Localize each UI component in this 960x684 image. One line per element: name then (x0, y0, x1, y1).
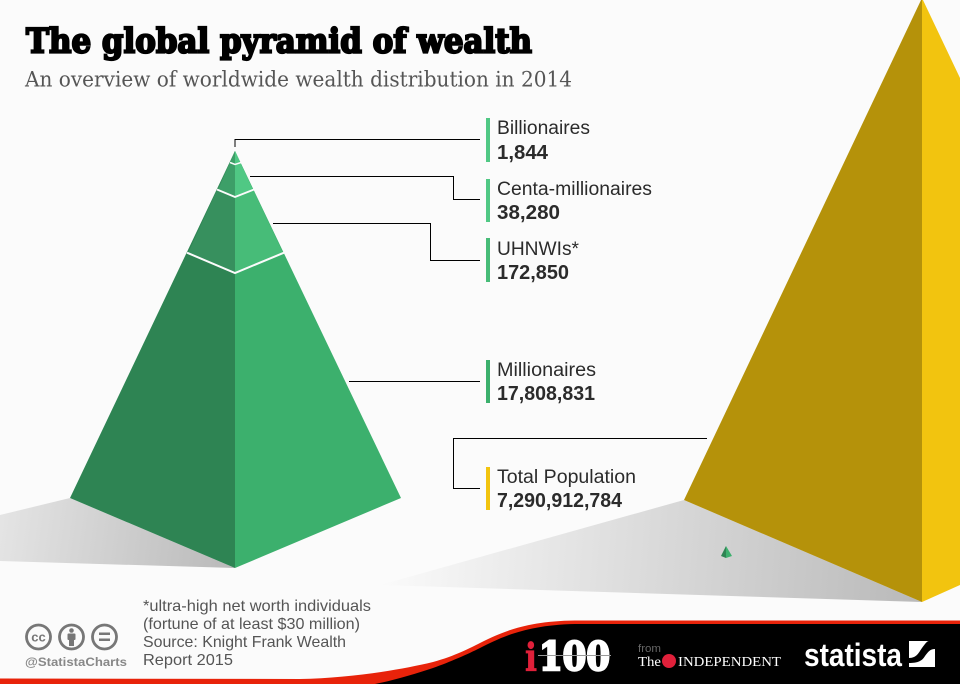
footnote and source: Source: Knight Frank Wealth (143, 634, 346, 651)
connector: billionaires (235, 140, 480, 147)
connector: centa-millionaires (250, 176, 480, 200)
label: millionaires: 17,808,831 (497, 383, 595, 405)
icon: creative commons licence: cc (31, 630, 46, 644)
connector: millionaires (349, 380, 480, 382)
label: total population: 7,290,912,784 (497, 490, 623, 512)
footer band: black (375, 624, 960, 684)
label: total population (486, 467, 636, 512)
label: millionaires (486, 360, 596, 405)
label: UHNWIs: UHNWIs* (497, 239, 580, 260)
shadow: green pyramid (0, 498, 235, 568)
connector: UHNWIs (273, 224, 480, 260)
label: centa-millionaires (486, 179, 652, 224)
footnote and source: *ultra-high net worth individuals (143, 598, 371, 615)
label: billionaires (486, 118, 590, 164)
chart: gold population pyramid (684, 0, 960, 602)
label: centa-millionaires: 38,280 (497, 202, 560, 224)
logo: from The Independent: from (638, 643, 661, 655)
footnote and source: (fortune of at least $30 million) (143, 616, 360, 633)
label: billionaires: Billionaires (497, 118, 590, 139)
label: UHNWIs (486, 238, 580, 284)
logo: from The Independent: The (638, 655, 661, 670)
logo: i100: 100 (539, 634, 610, 680)
logo: from The Independent: INDEPENDENT (678, 655, 781, 670)
connector: total population (454, 438, 707, 488)
icon: tiny green pyramid for scale (721, 546, 732, 558)
footnote and source (143, 598, 371, 669)
footnote and source: Report 2015 (143, 652, 233, 669)
icon: creative commons licence (26, 625, 116, 649)
shadow: population pyramid (380, 500, 922, 602)
chart: green wealth pyramid (70, 151, 401, 568)
label: UHNWIs: 172,850 (497, 262, 569, 284)
logo: from The Independent (638, 643, 781, 670)
label: centa-millionaires: Centa-millionaires (497, 179, 652, 200)
label: billionaires: 1,844 (497, 142, 549, 164)
credit handle: @StatistaCharts (25, 655, 127, 669)
title: The global pyramid of wealth (26, 22, 532, 62)
label: millionaires: Millionaires (497, 360, 596, 381)
subtitle: An overview of worldwide wealth distribution in 2014 (24, 68, 572, 92)
label: total population: Total Population (497, 467, 636, 488)
logo: i100: i (525, 634, 537, 680)
footer band: red swoosh (0, 620, 960, 684)
logo: statista: statista (804, 637, 902, 673)
